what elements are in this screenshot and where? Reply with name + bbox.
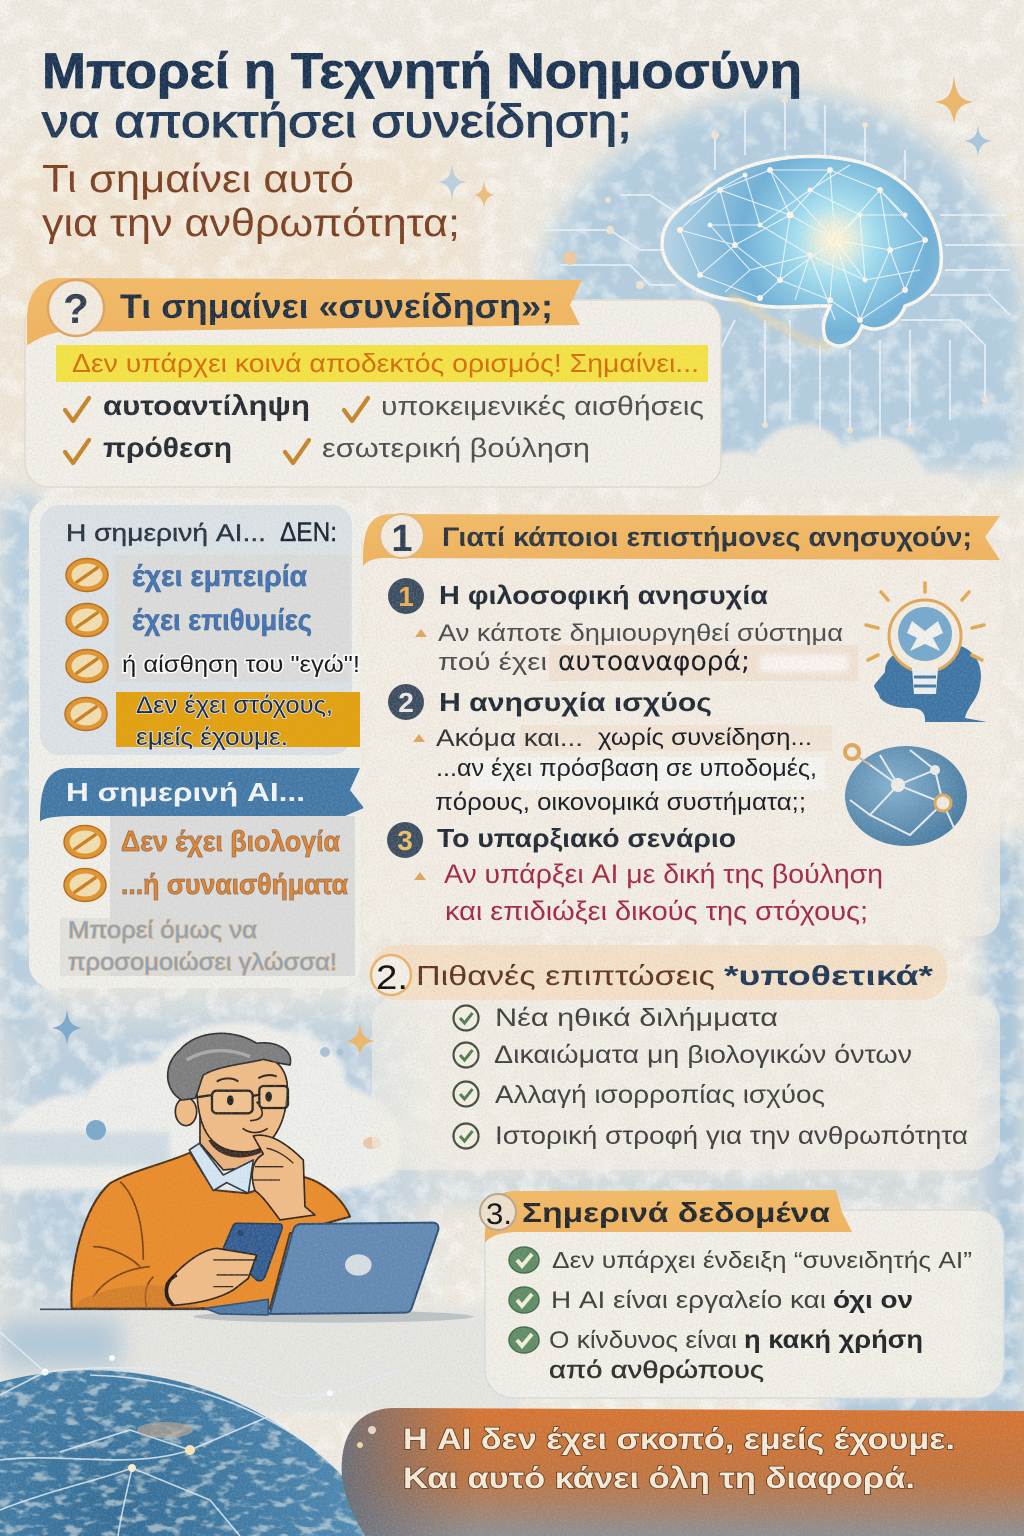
panel 1: why scientists worry — [363, 514, 1000, 936]
panel 3: current facts — [480, 1190, 1004, 1398]
main title: Τι σημαίνει αυτό — [42, 158, 354, 201]
item: existential scenario: Το υπαρξιακό σενάριο — [437, 823, 736, 853]
panel: today's AI has no biology: προσομοιώσει γλώσσα! — [68, 949, 337, 976]
section heading banner: 1 — [391, 518, 413, 560]
list: current facts: από ανθρώπους — [549, 1357, 764, 1384]
item: existential scenario: και επιδιώξει δικούς της στόχους; — [445, 896, 868, 926]
heading banner: Τι σημαίνει «συνείδηση»; — [120, 288, 553, 326]
panel: today's AI has no biology — [40, 768, 364, 976]
list: current facts — [509, 1247, 972, 1384]
blue ribbon heading — [40, 768, 364, 822]
icon: prohibition marks — [65, 558, 108, 730]
illustration: man with laptop and phone — [40, 1033, 473, 1323]
panel 2: possible consequences: *υποθετικά* — [724, 960, 933, 991]
list: consequences: Νέα ηθικά διλήμματα — [495, 1004, 778, 1032]
item: power concern: Η ανησυχία ισχύος — [439, 687, 712, 717]
item: power concern — [388, 684, 832, 816]
item: power concern: 2 — [398, 687, 414, 718]
main title: για την ανθρωπότητα; — [42, 202, 460, 245]
panel: what today's AI does not have — [29, 498, 361, 988]
panel: today's AI has no biology: ...ή συναισθήματα — [121, 869, 348, 901]
item: power concern: Ακόμα και... — [436, 725, 583, 752]
item: philosophical concern: αυτοαναφορά; — [558, 646, 750, 677]
panel: what today's AI does not have: ΔΕΝ: — [280, 517, 337, 547]
main title: να αποκτήσει συνείδηση; — [42, 95, 632, 147]
section heading banner — [363, 514, 1000, 566]
blue ribbon heading: Η σημερινή AI... — [66, 777, 305, 807]
callout: no goals: Δεν έχει στόχους, — [136, 692, 333, 719]
item: philosophical concern: Η φιλοσοφική ανησυχία — [439, 580, 768, 610]
section number: 2. — [376, 959, 408, 997]
list: current facts: όχι ον — [833, 1287, 913, 1314]
panel: what today's AI does not have: έχει επιθυμίες — [132, 604, 312, 637]
list: consequences: Αλλαγή ισορροπίας ισχύος — [495, 1081, 825, 1109]
list: current facts: Ο κίνδυνος είναι — [549, 1327, 737, 1354]
panel: what today's AI does not have: Η σημερινή AI... — [66, 520, 266, 547]
item: philosophical concern: 1 — [398, 581, 414, 612]
list: consequences — [454, 1004, 968, 1150]
list: consciousness traits: πρόθεση — [103, 432, 232, 463]
panel: what today's AI does not have: ή αίσθηση του "εγώ"! — [122, 651, 360, 677]
illustration: glowing AI brain — [540, 95, 1024, 490]
item: philosophical concern: πού έχει — [438, 649, 547, 676]
icon: head with lightbulb — [866, 583, 987, 722]
footer banner: key message: Η AI δεν έχει σκοπό, εμείς έχουμε. — [403, 1423, 955, 1456]
panel 2: possible consequences: Πιθανές επιπτώσεις — [416, 960, 715, 991]
section heading banner: 3. — [486, 1198, 512, 1231]
section number — [371, 955, 411, 997]
main title — [42, 43, 802, 245]
list: consciousness traits: εσωτερική βούληση — [322, 433, 590, 463]
item: philosophical concern — [388, 578, 858, 681]
item: existential scenario: 3 — [397, 825, 413, 856]
decorative sparkles near reader — [52, 1008, 375, 1056]
main title: Μπορεί η Τεχνητή Νοημοσύνη — [42, 43, 802, 99]
list: consciousness traits: υποκειμενικές αισθήσεις — [381, 391, 704, 421]
section heading banner: Γιατί κάποιοι επιστήμονες ανησυχούν; — [442, 522, 972, 552]
item: power concern: ...αν έχει πρόσβαση σε υποδομές, — [436, 755, 817, 782]
icon: question mark — [48, 280, 104, 336]
list: current facts: Δεν υπάρχει ένδειξη “συνειδητής AI” — [552, 1247, 972, 1273]
item: power concern: χωρίς συνείδηση... — [598, 724, 812, 750]
item: existential scenario — [387, 822, 883, 926]
panel: what today's AI does not have: έχει εμπειρία — [132, 560, 308, 593]
list: current facts: Η AI είναι εργαλείο και — [551, 1287, 826, 1314]
decorative sparkles top — [438, 75, 992, 208]
list: consequences: Ιστορική στροφή για την ανθρωπότητα — [495, 1122, 968, 1150]
list: current facts: η κακή χρήση — [744, 1326, 923, 1354]
heading banner — [27, 278, 582, 345]
item: existential scenario: Αν υπάρξει AI με δική της βούληση — [444, 859, 883, 889]
section heading banner: Σημερινά δεδομένα — [522, 1197, 830, 1228]
item: philosophical concern: Αν κάποτε δημιουργηθεί σύστημα — [438, 620, 843, 647]
highlighted definition: Δεν υπάρχει κοινά αποδεκτός ορισμός! Σημαίνει... — [72, 348, 699, 378]
footer banner: key message: Και αυτό κάνει όλη τη διαφορά. — [403, 1462, 915, 1495]
callout: no goals — [116, 692, 360, 751]
footer banner: key message — [342, 1408, 1024, 1536]
clouds behind the reader — [0, 1022, 520, 1413]
item: power concern: πόρους, οικονομικά συστήματα;; — [435, 789, 806, 816]
list: consciousness traits: αυτοαντίληψη — [103, 390, 310, 421]
globe at bottom-left — [0, 1332, 400, 1536]
section heading banner — [480, 1190, 852, 1243]
panel: today's AI has no biology: Δεν έχει βιολογία — [121, 826, 340, 858]
icon: question mark: ? — [63, 285, 89, 332]
callout: no goals: εμείς έχουμε. — [136, 724, 288, 751]
icon: network sphere — [845, 745, 967, 846]
panel: what consciousness means — [25, 278, 721, 487]
list: consciousness traits — [65, 390, 704, 463]
panel 2: possible consequences — [371, 945, 1000, 1170]
panel: today's AI has no biology: Μπορεί όμως να — [68, 917, 257, 944]
list: consequences: Δικαιώματα μη βιολογικών όντων — [494, 1041, 912, 1069]
